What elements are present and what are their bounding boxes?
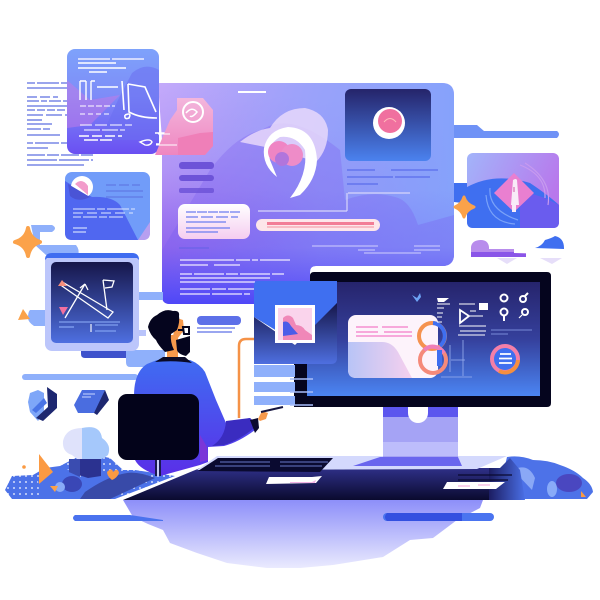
collar	[155, 357, 192, 363]
person	[134, 310, 283, 476]
icon: shield cube	[28, 387, 57, 421]
small cloud strip	[471, 236, 564, 264]
circle menu icon	[492, 346, 518, 372]
progress bar	[256, 219, 380, 231]
small blue heart mark	[412, 293, 421, 302]
side label bar	[197, 316, 241, 332]
tab connector right	[454, 125, 559, 138]
cloud with cube	[63, 427, 109, 478]
foliage left	[5, 453, 175, 499]
orange shapes	[39, 454, 119, 492]
icon: pink hexagon with swirl	[155, 98, 213, 155]
desk	[123, 456, 525, 500]
chair	[118, 394, 199, 476]
glasses	[178, 327, 189, 334]
small tablet panel	[18, 253, 165, 367]
star and small bars left	[15, 225, 79, 256]
play icon and details	[437, 298, 532, 377]
icon: book cube	[74, 390, 109, 415]
panel: main browser window	[158, 83, 454, 304]
dark media inset with pink disc	[345, 89, 431, 161]
icon: orange star	[455, 197, 474, 217]
long bar	[22, 374, 138, 380]
menu pills	[179, 162, 214, 193]
hair	[148, 310, 179, 352]
white crescent with pink circles	[264, 127, 317, 198]
right text lines	[347, 170, 438, 184]
neck	[167, 335, 178, 358]
monitor stand	[353, 405, 462, 466]
ground shadow	[123, 500, 483, 568]
paper notes	[266, 476, 322, 484]
panel: second card	[65, 172, 150, 240]
foliage right	[497, 456, 593, 499]
cuff and hand	[250, 418, 259, 433]
header line	[238, 91, 266, 93]
flag outline	[122, 81, 157, 119]
face	[173, 318, 184, 338]
text lines left of card	[27, 83, 93, 165]
image thumbnail	[275, 305, 315, 343]
screen key icons	[500, 293, 528, 321]
background hills in main window	[162, 123, 454, 304]
rings	[419, 323, 446, 373]
orange connector	[239, 339, 254, 418]
note on screen	[348, 315, 438, 378]
keyboard	[198, 458, 333, 472]
sweater	[134, 360, 259, 476]
pale stacked bars	[254, 365, 295, 405]
white note	[178, 204, 250, 239]
stylus	[261, 407, 283, 412]
floor bars	[73, 513, 494, 521]
body text lines	[179, 248, 290, 294]
floating window over monitor	[254, 281, 337, 405]
monitor	[294, 272, 551, 407]
panel: right diamond card	[454, 153, 559, 228]
beard	[176, 336, 190, 356]
panel: top-left card	[67, 49, 180, 154]
desk surface	[197, 456, 507, 470]
